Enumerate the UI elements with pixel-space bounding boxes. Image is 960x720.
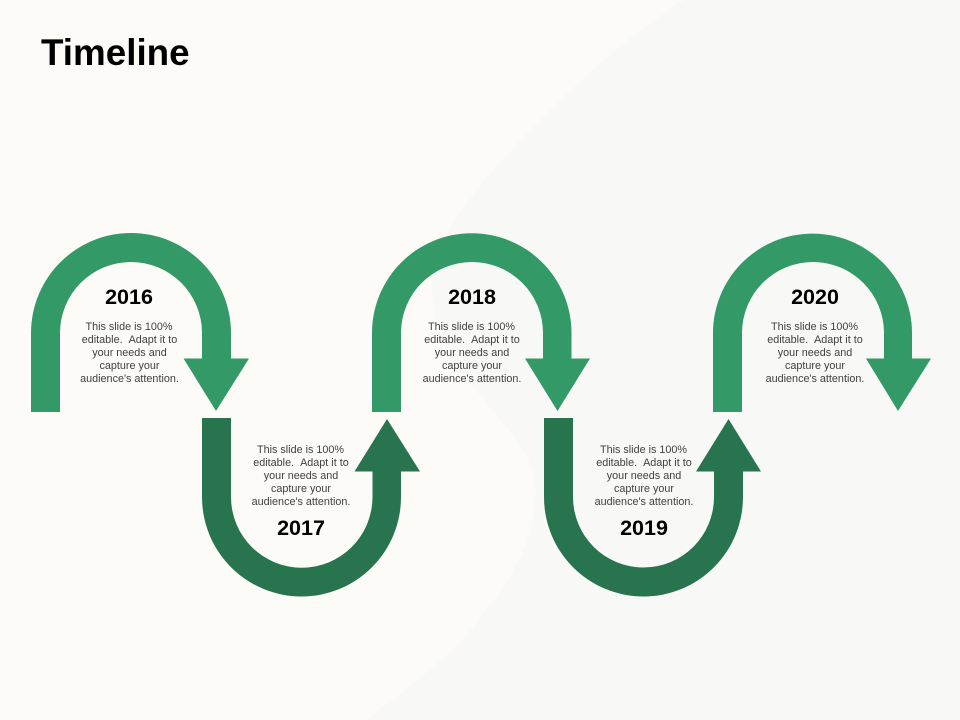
block: 2017: This slide is 100% <box>257 444 344 456</box>
block: 2019 <box>595 444 693 540</box>
block: 2017: capture your <box>271 483 331 495</box>
block: 2017: your needs and <box>264 470 338 482</box>
arrow: 2019 <box>544 418 761 596</box>
block: 2018: capture your <box>442 360 502 372</box>
block: 2016: 2016 <box>105 285 153 309</box>
block: 2020: This slide is 100% <box>771 321 858 333</box>
arrow: 2020 <box>713 234 931 412</box>
block: 2018: editable. Adapt it to <box>424 334 520 346</box>
block: 2016: editable. Adapt it to <box>82 334 177 346</box>
block: 2016: This slide is 100% <box>85 321 173 333</box>
block: 2019: capture your <box>614 483 674 495</box>
block: 2016: capture your <box>99 360 160 372</box>
block: 2020 <box>766 285 864 385</box>
block: 2020: your needs and <box>778 347 852 359</box>
block: 2017: audience's attention. <box>252 496 350 508</box>
block: 2019: your needs and <box>607 470 681 482</box>
block: 2017: editable. Adapt it to <box>253 457 349 469</box>
block: 2019: editable. Adapt it to <box>596 457 692 469</box>
arrow: 2017 <box>202 418 420 596</box>
block: 2018: 2018 <box>448 285 496 309</box>
block: 2016: audience's attention. <box>80 373 179 385</box>
block: 2018: This slide is 100% <box>428 321 515 333</box>
arrow: 2018 <box>372 233 590 412</box>
block: 2016: your needs and <box>92 347 167 359</box>
block: 2019: 2019 <box>620 516 668 540</box>
block: 2018: audience's attention. <box>423 373 521 385</box>
title: Timeline <box>41 32 190 72</box>
block: 2018 <box>423 285 521 385</box>
block: 2017 <box>252 444 350 540</box>
block: 2019: audience's attention. <box>595 496 693 508</box>
block: 2019: This slide is 100% <box>600 444 687 456</box>
arrow: 2016 <box>31 233 249 412</box>
block: 2016 <box>80 285 179 385</box>
block: 2020: audience's attention. <box>766 373 864 385</box>
block: 2018: your needs and <box>435 347 509 359</box>
block: 2020: 2020 <box>791 285 839 309</box>
block: 2020: capture your <box>785 360 845 372</box>
block: 2020: editable. Adapt it to <box>767 334 863 346</box>
block: 2017: 2017 <box>277 516 325 540</box>
